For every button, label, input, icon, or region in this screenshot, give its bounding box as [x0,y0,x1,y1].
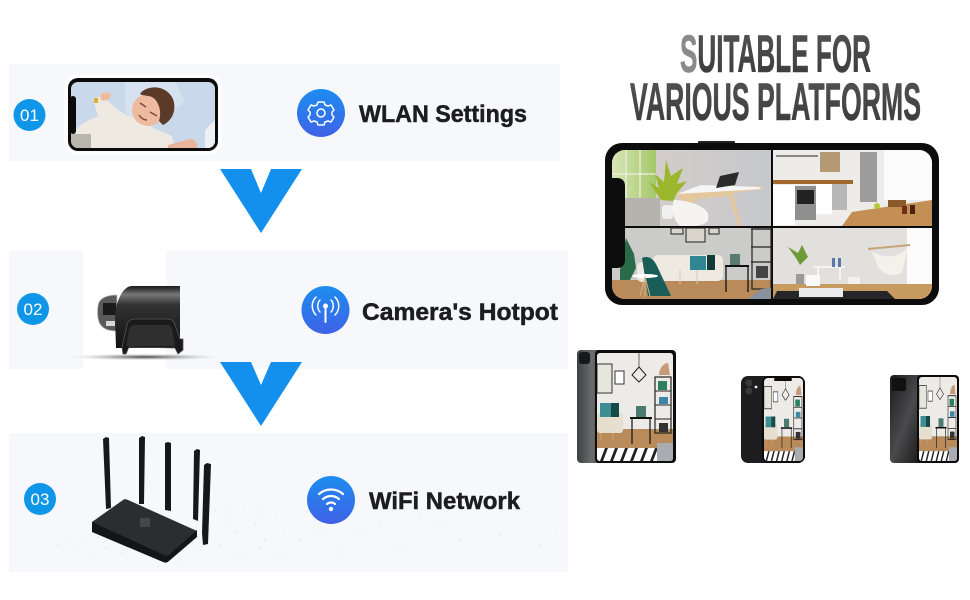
icon: hotspot antenna [302,286,350,334]
panel: step 1 background [9,64,560,161]
router product [92,436,211,563]
badge: 03: 03 [31,490,49,509]
view: home office [612,150,771,226]
badge: 02: 02 [24,300,42,319]
icon: wifi [307,476,355,524]
phone with sleeping baby [68,78,218,151]
panel: step 3 background [9,433,568,572]
heading [630,25,921,132]
icon: gear [297,89,345,137]
dotted wave texture [57,505,556,561]
large phone with four camera views [605,141,939,305]
panel: step 2 background [9,251,568,369]
label: Camera's Hotpot: Camera's Hotpot [362,299,558,326]
view: hammock room [773,228,932,299]
badge: 02 [17,293,49,325]
badge: 03 [24,483,56,515]
view: living room [612,228,771,299]
badge: 01: 01 [20,106,39,125]
label: WLAN Settings: WLAN Settings [359,101,527,128]
tablet [577,350,676,463]
camera product [67,286,223,360]
arrow: step 1 to step 2 [220,169,302,233]
badge: 01 [14,99,46,131]
smartphone with quad camera [890,375,959,463]
view: kitchen [773,150,932,226]
smartphone with dual camera [741,376,805,463]
label: WiFi Network: WiFi Network [369,488,521,515]
arrow: step 2 to step 3 [220,362,302,426]
